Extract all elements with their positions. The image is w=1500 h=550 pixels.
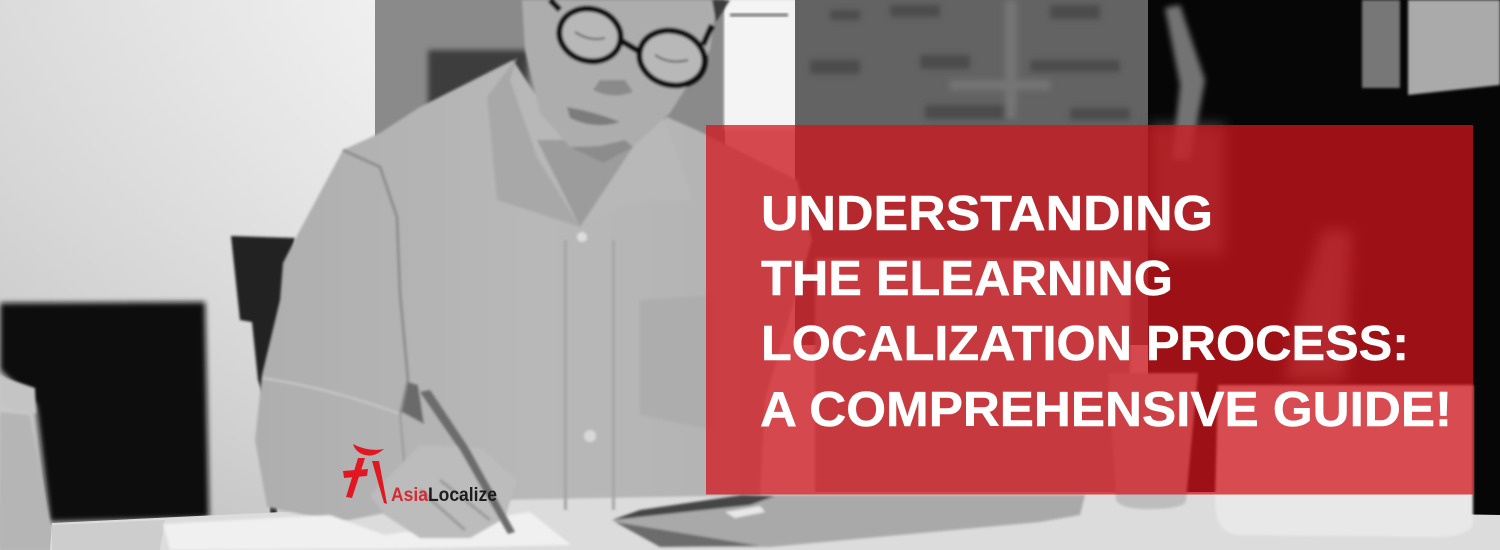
logo mark: [343, 444, 387, 504]
shirt body: [255, 60, 812, 522]
laptop: [612, 495, 1085, 547]
laptop screen back: [815, 258, 1130, 498]
face: [522, 0, 717, 163]
glasses: [553, 2, 711, 93]
notebook: [163, 512, 571, 550]
title: UNDERSTANDING: [761, 187, 1213, 241]
title: A COMPREHENSIVE GUIDE!: [760, 383, 1452, 437]
chair: [231, 236, 295, 420]
sleeve seam: [343, 150, 408, 415]
hair: [712, 0, 730, 22]
shirt buttons: [577, 232, 587, 242]
title: LOCALIZATION PROCESS:: [761, 317, 1409, 371]
hand and pen: [370, 390, 517, 538]
white box: [1215, 385, 1473, 537]
table: [50, 492, 1500, 550]
red overlay panel: [706, 125, 1473, 494]
title: THE ELEARNING: [761, 252, 1173, 306]
collar right: [580, 117, 693, 227]
couch: [0, 302, 209, 522]
logo: [343, 444, 497, 506]
title: [760, 187, 1452, 437]
cup: [1108, 373, 1198, 509]
collar left: [487, 57, 580, 227]
logo wordmark: AsiaLocalize: [391, 485, 497, 506]
man: [255, 0, 812, 522]
neck: [537, 140, 640, 227]
